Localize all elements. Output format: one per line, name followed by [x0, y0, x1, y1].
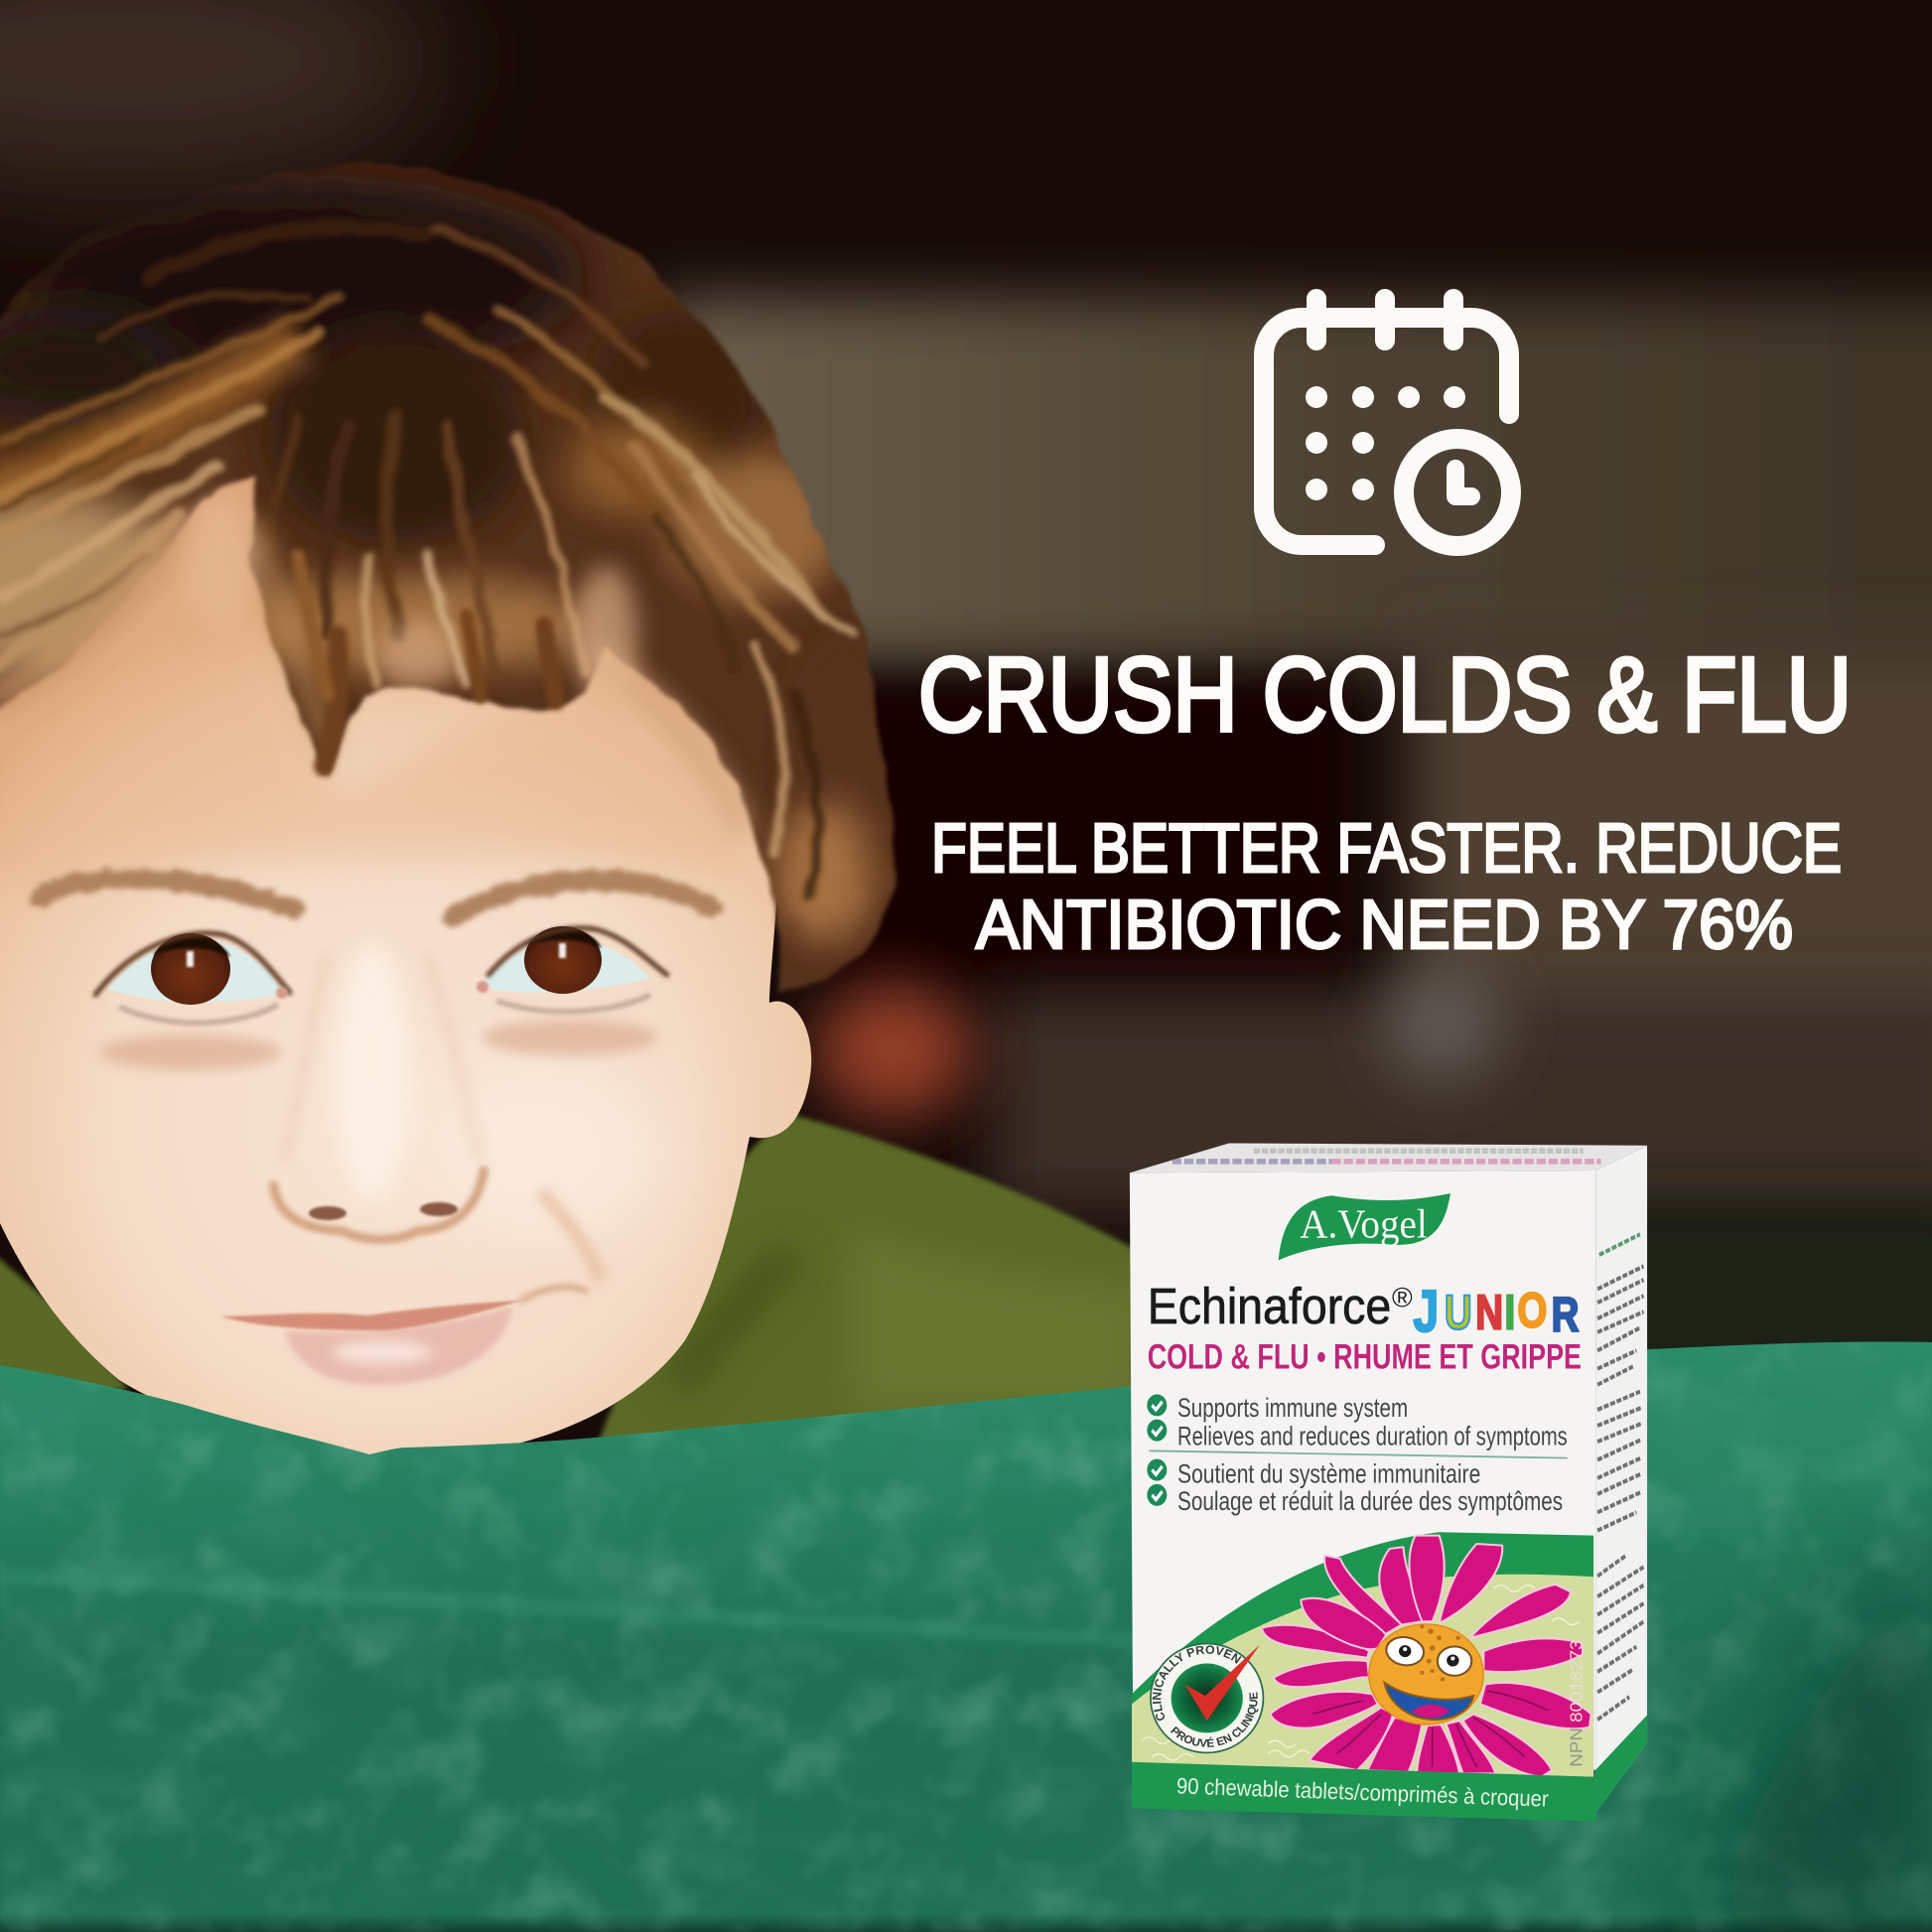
badge lettering: PROUVÉ EN CLINIQUE — [1171, 1692, 1259, 1747]
box lower artwork — [1132, 1532, 1596, 1821]
JUNIOR wordmark: N — [1475, 1286, 1503, 1339]
benefit list: Soulage et réduit la durée des symptômes — [1177, 1487, 1563, 1517]
under-eye shadows — [99, 1020, 657, 1070]
box top — [1130, 1143, 1647, 1173]
left eye — [95, 933, 290, 1023]
check icons — [1147, 1394, 1167, 1506]
boy: hair and face — [0, 139, 933, 1457]
petals — [1262, 1536, 1591, 1777]
box upper structure and text — [1130, 1143, 1647, 1820]
JUNIOR wordmark: U — [1445, 1286, 1472, 1339]
benefit list — [1147, 1393, 1568, 1517]
benefit list: Soutient du système immunitaire — [1177, 1459, 1480, 1489]
badge lettering: CLINICALLY PROVEN — [1152, 1645, 1241, 1722]
quantity line: 90 chewable tablets/comprimés à croquer — [1176, 1773, 1549, 1812]
product name: ® — [1392, 1284, 1413, 1313]
hair strands — [0, 227, 854, 894]
box top mirrored artwork — [1173, 1151, 1601, 1162]
nose — [273, 943, 484, 1239]
icon: calendar with clock — [1264, 299, 1511, 546]
flower freckles — [1420, 1624, 1460, 1681]
cheek light — [447, 1062, 665, 1241]
flower smile — [1385, 1683, 1473, 1720]
benefit list: Relieves and reduces duration of symptoms — [1177, 1422, 1568, 1451]
product name: Echinaforce — [1148, 1277, 1391, 1334]
flower mascot — [1262, 1536, 1591, 1777]
logo: A.Vogel — [1279, 1193, 1450, 1260]
eyebrows — [40, 879, 713, 917]
clinically proven badge — [1150, 1642, 1265, 1753]
box front panel — [1130, 1171, 1595, 1770]
soft forehead edge — [0, 526, 740, 824]
flower head — [1369, 1624, 1483, 1725]
subheading: ANTIBIOTIC NEED BY 76% — [976, 886, 1793, 963]
logo: A.Vogel: A.Vogel — [1300, 1202, 1428, 1248]
green arc and pale field — [1132, 1532, 1593, 1777]
box side panel — [1590, 1146, 1647, 1820]
sweater — [0, 1114, 1172, 1449]
hair — [0, 161, 899, 994]
velvet sofa — [0, 1330, 1932, 1932]
mouth — [220, 1191, 600, 1385]
right eye — [477, 926, 667, 1012]
JUNIOR wordmark: R — [1552, 1289, 1580, 1342]
JUNIOR wordmark: O — [1517, 1284, 1547, 1338]
subheading — [931, 809, 1842, 963]
benefit list: Supports immune system — [1177, 1393, 1408, 1424]
subtitle: COLD & FLU • RHUME ET GRIPPE — [1148, 1337, 1582, 1376]
JUNIOR wordmark: J — [1413, 1280, 1439, 1344]
face — [0, 437, 811, 1457]
NPN number: NPN 80018273 — [1567, 1640, 1586, 1767]
product box — [1130, 1144, 1648, 1821]
fringe tips — [298, 556, 556, 766]
JUNIOR wordmark: I — [1505, 1286, 1515, 1339]
petal veins — [1312, 1691, 1549, 1767]
bottom green band — [1132, 1762, 1596, 1822]
forehead tint — [0, 516, 745, 894]
flower eyes — [1384, 1634, 1471, 1676]
badge lettering — [1152, 1645, 1259, 1747]
forehead showing through fringe — [185, 496, 637, 705]
